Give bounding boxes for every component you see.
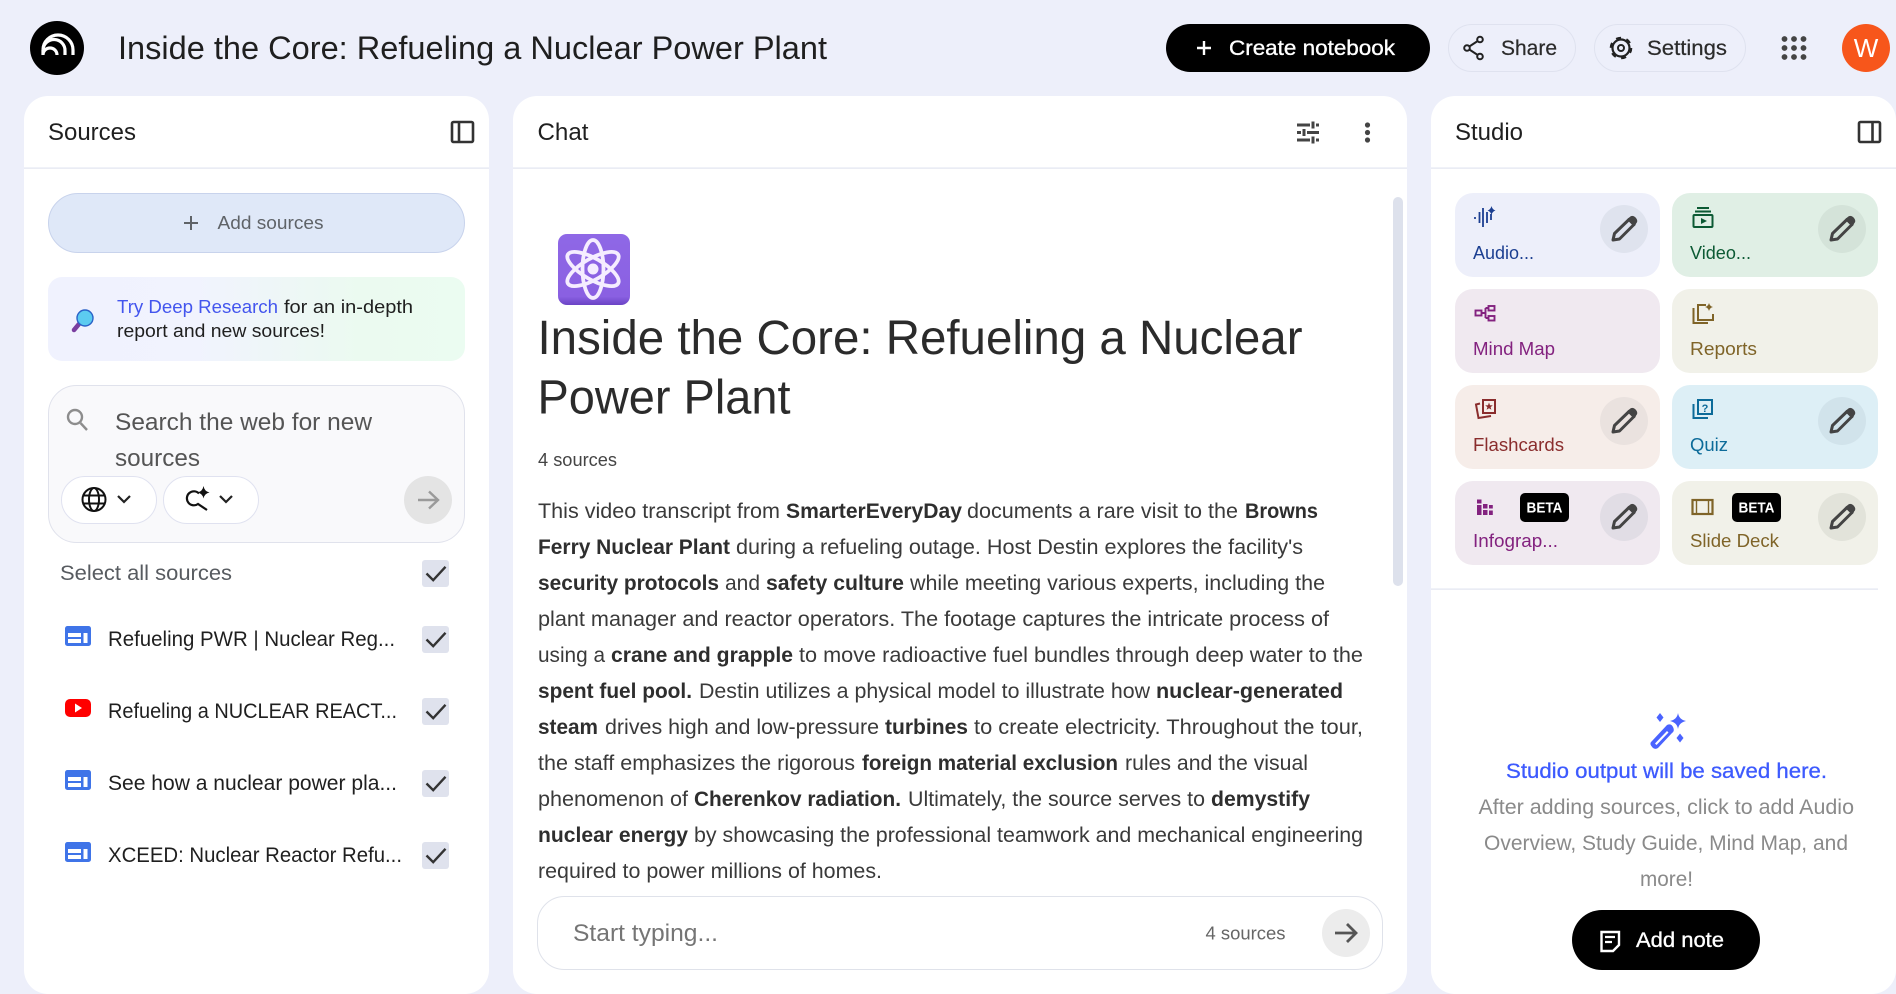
pill: web filter: [62, 476, 156, 524]
callout text: [117, 297, 413, 341]
summary text: SmarterEveryDay: [786, 500, 962, 523]
card: reports: Reports: [1690, 339, 1757, 359]
button: settings: Settings: [1647, 37, 1727, 60]
studio empty state message: Studio output will be saved here.: [1506, 760, 1827, 783]
avatar: W: [1854, 33, 1879, 63]
icon: more menu: [1365, 122, 1370, 143]
header bar: [30, 21, 1890, 75]
card: video overview: Video...: [1690, 243, 1751, 263]
card: mind map: Mind Map: [1473, 339, 1555, 359]
summary text: to create electricity. Throughout the tour,: [974, 716, 1363, 739]
summary text: drives high and low-pressure: [605, 716, 879, 739]
source count: 4 sources: [538, 450, 617, 470]
summary text: nuclear-generated: [1156, 680, 1343, 703]
source item: refueling a nuclear reactor: [65, 698, 449, 725]
summary text: Browns: [1245, 500, 1318, 523]
studio empty state message: [1478, 760, 1854, 891]
badge: beta: BETA: [1526, 500, 1563, 516]
source item: xceed: [65, 842, 449, 869]
summary text: security protocols: [538, 572, 719, 595]
summary text: phenomenon of: [538, 788, 688, 811]
summary text: to move radioactive fuel bundles through deep water to the: [799, 644, 1363, 667]
search placeholder: [115, 409, 373, 472]
icon: NotebookLM logo: [30, 21, 84, 75]
select all sources row: Select all sources: [60, 562, 232, 585]
summary text: required to power millions of homes.: [538, 860, 882, 883]
summary text: documents a rare visit to the: [967, 500, 1238, 523]
summary text: safety culture: [766, 572, 904, 595]
chat input: [538, 896, 1382, 970]
panel: studio: [1431, 96, 1896, 994]
summary text: plant manager and reactor operators. The footage captures the intricate process of: [538, 608, 1329, 631]
card: quiz: [1672, 385, 1878, 469]
badge: beta: BETA: [1738, 500, 1775, 516]
search placeholder: sources: [115, 445, 200, 472]
icon: atom emoji: [558, 234, 630, 305]
summary text: Destin utilizes a physical model to illustrate how: [699, 680, 1151, 703]
source item: see how a nuclear power plant: See how a nuclear power pla...: [108, 772, 397, 795]
card: audio overview: [1455, 193, 1660, 277]
panel: chat: [513, 96, 1407, 994]
callout: try deep research: [48, 277, 465, 361]
summary text: [538, 500, 1363, 883]
callout text: for an in-depth: [284, 297, 413, 317]
summary text: This video transcript from: [538, 500, 780, 523]
summary text: Ferry Nuclear Plant: [538, 536, 730, 559]
summary text: rules and the visual: [1125, 752, 1308, 775]
summary text: foreign material exclusion: [862, 752, 1118, 775]
heading: chat: Chat: [538, 119, 589, 146]
panel: sources: [24, 96, 489, 994]
button: send: [1322, 909, 1370, 957]
summary text: while meeting various experts, including the: [909, 572, 1325, 595]
icon: search: [68, 410, 87, 430]
button: create notebook: Create notebook: [1229, 37, 1396, 60]
chat title: Inside the Core: Refueling a Nuclear: [538, 312, 1303, 365]
badge: beta: [1520, 493, 1569, 522]
button: create notebook: [1166, 24, 1430, 72]
card: quiz: Quiz: [1690, 435, 1728, 455]
heading: sources: Sources: [48, 119, 136, 146]
card: quiz: ?: [1702, 403, 1709, 415]
source item: see how a nuclear power plant: [65, 770, 449, 797]
chat title: [538, 312, 1303, 424]
summary text: and: [725, 572, 760, 595]
source item: xceed: XCEED: Nuclear Reactor Refu...: [108, 844, 402, 867]
search box: [48, 386, 464, 542]
callout text: report and new sources!: [117, 321, 325, 341]
icon: collapse studio panel: [1859, 122, 1880, 142]
select all sources row: [60, 560, 449, 587]
summary text: Cherenkov radiation.: [694, 788, 901, 811]
card: slide deck: [1672, 481, 1878, 565]
icon: magnifier: [74, 310, 93, 330]
studio empty state message: more!: [1640, 868, 1693, 891]
notebook title: Inside the Core: Refueling a Nuclear Power Plant: [118, 30, 827, 66]
summary text: Ultimately, the source serves to: [908, 788, 1205, 811]
card: flashcards: [1455, 385, 1660, 469]
button: add note: Add note: [1636, 929, 1724, 952]
icon: collapse sources panel: [452, 122, 473, 142]
chat input: 4 sources: [1206, 924, 1286, 944]
button: add sources: Add sources: [218, 213, 324, 233]
card: mind map: [1455, 289, 1660, 373]
icon: tune sliders: [1297, 122, 1319, 144]
card: infographic: [1455, 481, 1660, 565]
scrollbar: [1393, 197, 1403, 586]
card: reports: [1672, 289, 1878, 373]
summary text: steam: [538, 716, 598, 739]
summary text: turbines: [885, 716, 968, 739]
icon: magic wand: [1650, 713, 1686, 749]
source item: refueling PWR: Refueling PWR | Nuclear Reg...: [108, 628, 395, 651]
summary text: nuclear energy: [538, 824, 688, 847]
summary text: using a: [538, 644, 605, 667]
summary text: during a refueling outage. Host Destin explores the facility's: [736, 536, 1303, 559]
button: add note: [1572, 910, 1760, 970]
card: slide deck: Slide Deck: [1690, 531, 1780, 551]
card: flashcards: Flashcards: [1473, 435, 1564, 455]
chat title: Power Plant: [538, 372, 790, 424]
summary text: the staff emphasizes the rigorous: [538, 752, 855, 775]
heading: studio: Studio: [1455, 119, 1523, 146]
summary text: demystify: [1211, 788, 1310, 811]
studio empty state message: Overview, Study Guide, Mind Map, and: [1484, 832, 1848, 855]
avatar: [1842, 24, 1890, 72]
pill: research mode filter: [164, 476, 258, 524]
icon: apps grid: [1782, 36, 1806, 60]
summary text: by showcasing the professional teamwork and mechanical engineering: [694, 824, 1363, 847]
button: settings: [1594, 24, 1746, 72]
button: add sources: [48, 194, 464, 252]
summary text: crane and grapple: [611, 644, 793, 667]
button: share: [1448, 24, 1576, 72]
card: video overview: [1672, 193, 1878, 277]
badge: beta: [1732, 493, 1781, 522]
card: infographic: Infograp...: [1473, 531, 1558, 551]
source item: refueling a nuclear reactor: Refueling a NUCLEAR REACT...: [108, 700, 397, 723]
studio empty state message: After adding sources, click to add Audio: [1478, 796, 1854, 819]
source item: refueling PWR: [65, 626, 449, 653]
button: share: Share: [1501, 37, 1557, 60]
card: audio overview: Audio...: [1473, 243, 1534, 263]
button: submit search: [404, 476, 452, 524]
callout text: Try Deep Research: [117, 297, 278, 317]
chat input: Start typing...: [573, 920, 718, 947]
search placeholder: Search the web for new: [115, 409, 373, 436]
summary text: spent fuel pool.: [538, 680, 692, 703]
